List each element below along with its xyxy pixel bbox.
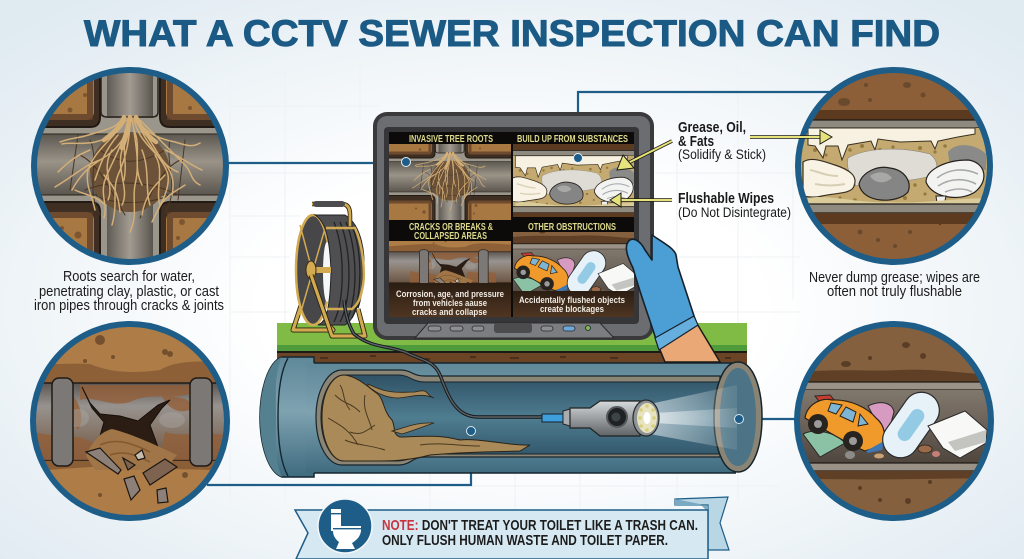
tablet panel headings: OTHER OBSTRUCTIONS bbox=[528, 222, 616, 233]
tablet panel headings: INVASIVE TREE ROOTS bbox=[409, 134, 493, 145]
tablet panel captions: cracks and collapse bbox=[412, 307, 487, 318]
tablet panel captions: Accidentally flushed objects bbox=[519, 295, 625, 306]
label: flushable wipes: Flushable Wipes bbox=[678, 190, 774, 207]
tablet panel captions: from vehicles aause bbox=[413, 298, 487, 309]
icon: toilet bbox=[318, 499, 372, 553]
tablet panel captions: create blockages bbox=[540, 304, 604, 315]
label: flushable wipes bbox=[678, 190, 791, 220]
caption: roots: Roots search for water, bbox=[63, 269, 195, 285]
ground strip bbox=[277, 323, 747, 364]
soil and root blockage bbox=[322, 375, 530, 461]
camera probe bbox=[344, 300, 659, 436]
label: grease, oil and fats: & Fats bbox=[678, 133, 714, 150]
note text: NOTE: DON'T TREAT YOUR TOILET LIKE A TRASH CAN. bbox=[382, 517, 698, 534]
caption: grease: often not truly flushable bbox=[827, 284, 962, 300]
title: WHAT A CCTV SEWER INSPECTION CAN FIND bbox=[84, 13, 940, 54]
circle: grease and wipes bbox=[795, 67, 993, 265]
note text: ONLY FLUSH HUMAN WASTE AND TOILET PAPER. bbox=[382, 532, 668, 549]
circle: cracked pipe bbox=[30, 321, 230, 521]
tablet panel headings bbox=[409, 134, 628, 242]
note text bbox=[382, 517, 698, 549]
cable reel bbox=[293, 204, 365, 336]
connector dots on pipe bbox=[466, 414, 744, 436]
tablet panel headings: BUILD UP FROM SUBSTANCES bbox=[517, 134, 628, 145]
label: grease, oil and fats: Grease, Oil, bbox=[678, 119, 746, 136]
arrow: wipes on tablet bbox=[610, 193, 672, 207]
caption: roots: penetrating clay, plastic, or cast bbox=[39, 284, 219, 300]
light beam bbox=[650, 385, 737, 450]
connector lines bbox=[207, 92, 832, 485]
tablet connector dots bbox=[402, 154, 582, 166]
tablet bbox=[365, 104, 654, 344]
caption: grease: Never dump grease; wipes are bbox=[809, 270, 980, 286]
gloved hand bbox=[626, 235, 720, 362]
circle: other obstructions bbox=[794, 321, 994, 521]
label: grease, oil and fats: (Solidify & Stick) bbox=[678, 147, 766, 162]
tablet panel captions bbox=[396, 289, 625, 318]
caption: roots: iron pipes through cracks & joints bbox=[34, 298, 224, 314]
arrow: grease to circle bbox=[750, 130, 832, 144]
tablet panel captions: Corrosion, age, and pressure bbox=[396, 289, 504, 300]
caption: roots bbox=[34, 269, 224, 314]
tablet panel headings: COLLAPSED AREAS bbox=[414, 231, 487, 242]
arrow: grease on tablet bbox=[617, 141, 672, 170]
circle: tree roots bbox=[31, 67, 229, 265]
note banner bbox=[295, 497, 729, 559]
tablet panel headings: CRACKS OR BREAKS & bbox=[409, 222, 493, 233]
label: flushable wipes: (Do Not Disintegrate) bbox=[678, 205, 791, 220]
label: grease, oil and fats bbox=[678, 119, 766, 162]
sewer pipe cutaway bbox=[260, 300, 762, 477]
caption: grease bbox=[809, 270, 980, 300]
